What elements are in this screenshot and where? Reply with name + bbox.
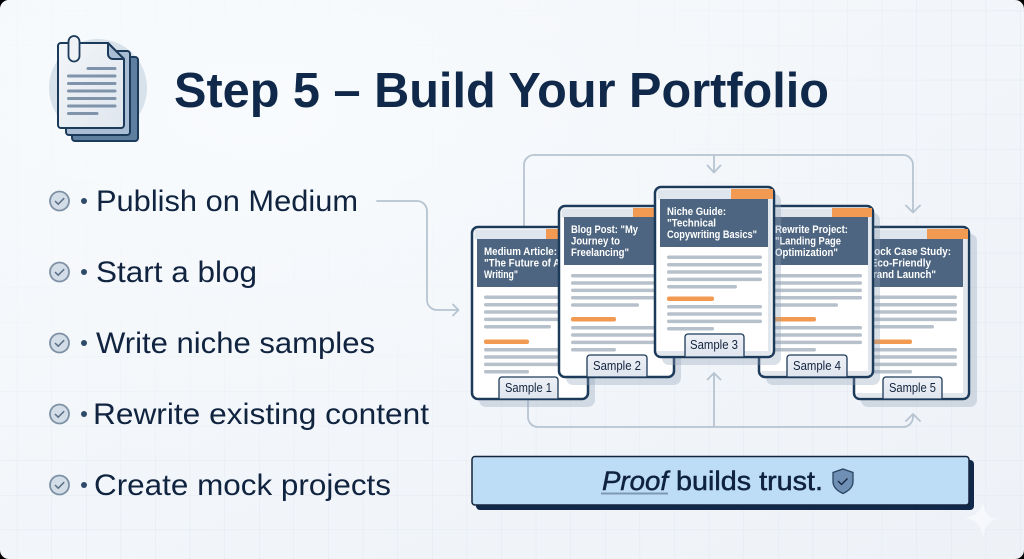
item: Write niche samples: Write niche samples [96,327,375,360]
card 5 header: Brand Launch" [866,269,936,281]
card 1 header [477,239,582,287]
card 4 header: "Landing Page [775,236,841,248]
card 4 tab: Sample 4 [793,359,841,373]
card 1 header: Writing" [484,269,518,281]
arrow: list to samples [377,201,458,316]
arrow: top connector [524,155,920,227]
card 1 header: "The Future of AI [484,258,563,270]
callout text: Proof: Proof [602,466,671,496]
card 4 header [764,217,868,265]
card 3 header: Copywriting Basics" [667,229,757,241]
card 1 header: Medium Article: [484,246,557,258]
card 2 tab: Sample 2 [593,359,641,373]
icon: shield [833,469,853,494]
checklist [50,185,430,502]
card 2 header: Journey to [571,236,620,248]
card 1 tab: Sample 1 [505,381,552,395]
item: Rewrite existing content: Rewrite existing content [93,398,430,431]
sample card 5 [854,227,977,407]
callout: proof builds trust [472,456,974,510]
card 4 header: Optimization" [775,247,838,259]
item: Start a blog: Start a blog [96,256,257,289]
card 2 header [564,217,668,265]
item: Create mock projects: Create mock projects [94,469,391,502]
card 2 tab [587,355,647,377]
arrow: bottom connector [528,373,920,427]
icon: sparkle watermark [965,502,1001,538]
card 3 header: "Technical [667,218,716,230]
card 5 header: "Eco-Friendly [866,258,932,270]
card 3 tab: Sample 3 [690,338,738,352]
sample card 2 [559,206,681,385]
underline [601,492,668,494]
sample card 4 [759,206,880,385]
callout text: builds trust: builds trust. [676,466,823,496]
card 5 tab [883,377,942,399]
card 2 header: Blog Post: "My [571,224,639,236]
card 5 tab: Sample 5 [889,381,936,395]
card 5 header [859,239,963,287]
sample card 3 [655,187,781,365]
card 4 header: Rewrite Project: [775,224,848,236]
card 2 header: Freelancing" [571,247,629,259]
sample card 1 [472,227,595,407]
title: Step 5 – Build Your Portfolio [174,64,829,118]
card 3 header [660,199,768,247]
card 3 tab [685,334,744,357]
card 4 tab [787,355,847,377]
card 3 header: Niche Guide: [667,206,726,218]
item: Publish on Medium: Publish on Medium [96,185,358,218]
card 1 tab [499,377,558,399]
card 5 header: Mock Case Study: [866,246,951,258]
icon: stacked documents with paperclip [49,36,147,141]
